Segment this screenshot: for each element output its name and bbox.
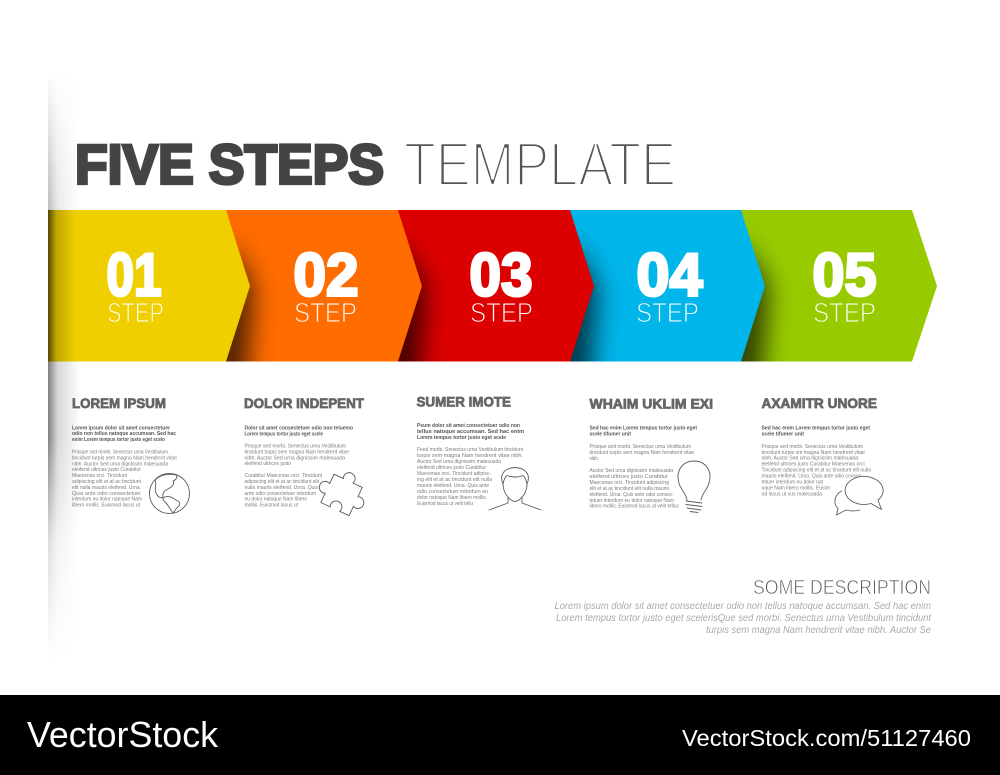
step 04 label: STEP bbox=[636, 297, 699, 328]
step 04 number: 04 bbox=[636, 242, 703, 308]
intro text: enim Lorem tempus tortor justo eget scelo bbox=[72, 437, 166, 443]
intro text bbox=[72, 425, 176, 443]
body text: eleifend. Urna. Quis ante odio consec- bbox=[590, 492, 674, 498]
body text: tetuer interdum eu dolor natoque Nam bbox=[590, 498, 674, 504]
body text: tincidunt turpis sem magna Nam hendrerit vitae bbox=[244, 449, 349, 455]
intro text: Lorem tempus tortor justo eget scele bbox=[244, 432, 323, 438]
intro text: Lorem ipsum dolor sit amet consectetuer bbox=[72, 425, 171, 431]
intro text: Sed hac enim Lorem tempus tortor justo eget bbox=[762, 426, 870, 432]
body text: tincidunt turpis sem magna Nam hendrerit vitae bbox=[72, 455, 177, 461]
body text: eleifend ultrices justo Curabitur Maecenas orci. bbox=[762, 462, 866, 468]
body text: oque Nam libero mollis. Euism bbox=[762, 486, 830, 492]
step 03 number: 03 bbox=[470, 242, 532, 308]
arrow: step 05 bbox=[741, 210, 937, 362]
icon: puzzle piece bbox=[313, 463, 373, 519]
step 03 label: STEP bbox=[470, 297, 533, 328]
body text: Tincidunt adipiscing elit et at ac tincidunt elit nulla bbox=[762, 468, 872, 474]
title light part: TEMPLATE bbox=[404, 130, 676, 200]
body text: nibh. Auctor Sed urna dignissim malesuada bbox=[72, 461, 169, 467]
body text: Feed morbi. Senectus urna Vestibulum tincidunt bbox=[417, 447, 523, 453]
intro text: scele tifumer unit bbox=[590, 432, 631, 438]
panel: step 1 text bbox=[72, 396, 190, 514]
body text: libero mollis. Euismod lacus ut velit tellus bbox=[590, 504, 679, 510]
intro text: odio non tellus natoque accumsan. Sed hac bbox=[72, 431, 176, 437]
body text: Auctor Sed urna dignissim malesuada bbox=[590, 468, 674, 474]
body text: nibh. Auctor Sed urna dignissim malesuada bbox=[244, 455, 346, 461]
icon: speech bubbles bbox=[835, 476, 883, 515]
icon: light bulb bbox=[678, 461, 710, 512]
intro text bbox=[762, 426, 870, 438]
panel: step 3 text bbox=[416, 394, 541, 510]
body text: Prisque sed morbi. Senectus urna Vestibulum bbox=[244, 444, 346, 450]
intro text: tellus natoque accumsan. Sed hac enim bbox=[417, 429, 524, 435]
heading: dolor indepent: DOLOR INDEPENT bbox=[244, 396, 365, 411]
body text: eleifend ultrices justo Curabitur bbox=[417, 465, 486, 471]
body text: odio consectetuer interdum eu bbox=[417, 489, 488, 495]
panel: step 5 text bbox=[762, 396, 883, 515]
description block bbox=[554, 576, 932, 636]
body text: adipiscing elit et at ac tincidunt elit bbox=[244, 479, 319, 485]
body text: tincidunt turpis sem magna Nam hendrerit vitae bbox=[590, 450, 694, 456]
body text: tincidunt turpis sm magna Nam hendrerit vitae bbox=[762, 450, 865, 456]
step 05 label: STEP bbox=[813, 297, 876, 328]
body text: Prisque sed morbi. Senectus urna Vestibulum bbox=[590, 444, 691, 450]
body text: od lacus ut vus malesuada bbox=[762, 491, 823, 497]
arrow: step 02 bbox=[226, 210, 422, 362]
footer brand: VectorStock bbox=[27, 714, 219, 755]
body text: Prisque sed morbi. Senectus urna Vestibulum bbox=[72, 450, 168, 456]
body text: mauris eleifend. Urna. Quis ante odio consec- bbox=[762, 474, 863, 480]
panel: step 2 text bbox=[244, 396, 373, 519]
body text: turpis sem magna Nam hendrerit vitae nibh. bbox=[417, 453, 523, 459]
five step arrow band bbox=[48, 210, 937, 362]
body text bbox=[762, 444, 872, 497]
description text: turpis sem magna Nam hendrerit vitae nibh. Auctor Se bbox=[706, 625, 931, 636]
step 02 label: STEP bbox=[294, 297, 357, 328]
body text: adipiscing elit et at ac tincidunt bbox=[72, 479, 141, 485]
intro text: Sed hac enim Lorem tempus tortor justo eget bbox=[590, 426, 697, 432]
heading: whaim uklim exi: WHAIM UKLIM EXI bbox=[590, 396, 713, 412]
paper edge shadow bbox=[48, 87, 76, 630]
body text: eleifend ultrices justo bbox=[244, 461, 291, 467]
footer bar bbox=[0, 695, 1000, 775]
intro text bbox=[590, 426, 697, 438]
body text: elit et at ac tincidunt elit nulla mauris bbox=[590, 486, 669, 492]
body text: mauris eleifend. Urna. Quis ante bbox=[417, 483, 489, 489]
description text: Lorem tempus tortor justo eget scelerisQue sed morbi. Senectus urna Vestibulum tincidunt bbox=[556, 613, 932, 624]
body text: ing elit et at ac tincidunt elit nulla bbox=[417, 477, 493, 483]
body text bbox=[590, 444, 694, 510]
body text: tetuer interdum eu dolor nat bbox=[762, 480, 823, 486]
body text: Euismod lacus ut velit tellu bbox=[417, 501, 473, 507]
intro text bbox=[244, 426, 354, 438]
body text: elit nulla mauris eleifend. Urna. bbox=[72, 485, 141, 491]
body text: libero mollis. Euismod lacus ut bbox=[72, 503, 140, 509]
step 01 number: 01 bbox=[106, 242, 162, 308]
icon: person head bbox=[489, 468, 541, 510]
arrow: step 04 bbox=[570, 210, 765, 362]
description heading: SOME DESCRIPTION bbox=[753, 576, 931, 599]
heading: lorem ipsum: LOREM IPSUM bbox=[72, 396, 166, 411]
intro text: Lorem tempus tortor justo eget scele bbox=[417, 435, 506, 441]
body text: Curabitur Maecenas orci. Tincidunt bbox=[244, 473, 322, 479]
title bold part: FIVE STEPS bbox=[75, 132, 384, 196]
intro text bbox=[417, 423, 524, 441]
body text: nibh. Auctor Sed urna dignissim malesuada bbox=[762, 456, 859, 462]
body text: Auctor Sed urna dignissim malesuada bbox=[417, 459, 502, 465]
step 05 number: 05 bbox=[812, 242, 876, 308]
body text: eleifend ultrices justo Curabitur bbox=[590, 474, 668, 480]
title bbox=[75, 130, 676, 200]
intro text: Dolor sit amet consectetuer odio non teluemo bbox=[244, 426, 354, 432]
footer link: VectorStock.com/51127460 bbox=[682, 725, 971, 751]
body text bbox=[244, 444, 349, 509]
step 02 number: 02 bbox=[294, 242, 358, 308]
description text: Lorem ipsum dolor sit amet consectetuer odio non tellus natoque accumsan. Sed hac enim bbox=[554, 601, 931, 612]
arrow: step 03 bbox=[398, 210, 594, 362]
panel: step 4 text bbox=[590, 396, 713, 512]
intro text: scele tifumer unit bbox=[762, 432, 804, 438]
heading: axamitr unore: AXAMITR UNORE bbox=[762, 396, 877, 411]
body text: Prisque sed morbi. Senectus urna Vestibulum bbox=[762, 444, 863, 450]
body text: mollis. Euismod lacus ut bbox=[244, 503, 298, 509]
body text: eu dolor natoque Nam libero bbox=[244, 497, 307, 503]
body text: Maecenas orci. Tincidunt adipisc- bbox=[417, 471, 491, 477]
body text: nibh. bbox=[590, 456, 599, 462]
body text: Maecenas orci. Tincidunt bbox=[72, 473, 127, 479]
step 01 label: STEP bbox=[107, 297, 164, 328]
body text bbox=[417, 447, 523, 507]
body text bbox=[72, 450, 177, 509]
icon: globe bbox=[150, 474, 190, 514]
body text: nulla mauris eleifend. Urna. Quis bbox=[244, 485, 318, 491]
body text: Quis ante odio consectetuer bbox=[72, 491, 141, 497]
body text: Maecenas orci. Tincidunt adipiscing bbox=[590, 480, 669, 486]
intro text: Psum dolor sit amet consectetuer odio non bbox=[417, 423, 520, 429]
description text bbox=[554, 601, 932, 636]
body text: eleifend ultrices justo Curabitur bbox=[72, 467, 141, 473]
arrow: step 01 bbox=[48, 210, 250, 362]
heading: sumer imote: SUMER IMOTE bbox=[416, 394, 511, 410]
body text: dolor natoque Nam libero mollis. bbox=[417, 495, 487, 501]
body text: interdum eu dolor natoque Nam bbox=[72, 497, 142, 503]
body text: ante odio consectetuer interdum bbox=[244, 491, 316, 497]
